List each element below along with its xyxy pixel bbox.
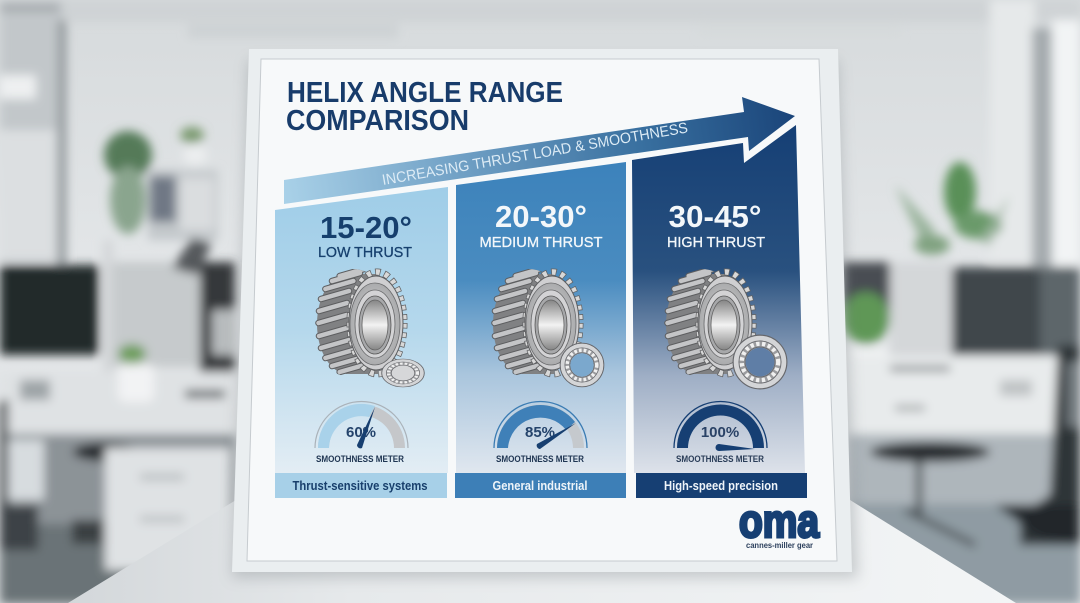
gauge: 85 percent: 85% (525, 424, 555, 441)
logo: oma (739, 495, 819, 547)
gauge: 100 percent (674, 402, 767, 464)
gauge: 100 percent: SMOOTHNESS METER (676, 454, 764, 464)
use-case bar: General industrial (492, 479, 588, 493)
low thrust range: 15-20° (320, 210, 412, 245)
use-case bar (636, 473, 807, 498)
icon: helical gear (666, 268, 753, 374)
high thrust label: HIGH THRUST (667, 234, 765, 251)
icon: bearing (382, 359, 424, 387)
title (286, 77, 563, 137)
gauge: 100 percent: 100% (701, 424, 739, 441)
panel: medium thrust (455, 162, 626, 498)
icon: helical gear (493, 268, 580, 374)
low thrust label: LOW THRUST (318, 244, 412, 261)
gauge: 85 percent: SMOOTHNESS METER (496, 454, 584, 464)
panel: low thrust (275, 187, 448, 498)
gauge: 60 percent: SMOOTHNESS METER (316, 454, 404, 464)
title: COMPARISON (286, 105, 469, 137)
use-case bar (275, 473, 447, 498)
use-case bar: High-speed precision (664, 479, 778, 493)
icon: bearing (560, 343, 604, 387)
icon: bearing (733, 335, 787, 389)
use-case bar: Thrust-sensitive systems (292, 479, 428, 493)
gauge: 60 percent (315, 402, 408, 464)
panel: high thrust (632, 125, 807, 498)
arrow: increasing thrust load and smoothness: INCREASING THRUST LOAD & SMOOTHNESS (381, 119, 689, 189)
medium thrust range: 20-30° (495, 199, 587, 234)
use-case bar (455, 473, 626, 498)
medium thrust label: MEDIUM THRUST (480, 234, 602, 251)
logo: cannes-miller gear (746, 540, 814, 550)
title: HELIX ANGLE RANGE (287, 77, 563, 109)
board (232, 49, 858, 578)
icon: helical gear (317, 268, 404, 374)
high thrust range: 30-45° (668, 199, 762, 234)
gauge: 85 percent (494, 402, 587, 464)
gauge: 60 percent: 60% (346, 424, 376, 441)
arrow: increasing thrust load and smoothness (284, 97, 795, 204)
